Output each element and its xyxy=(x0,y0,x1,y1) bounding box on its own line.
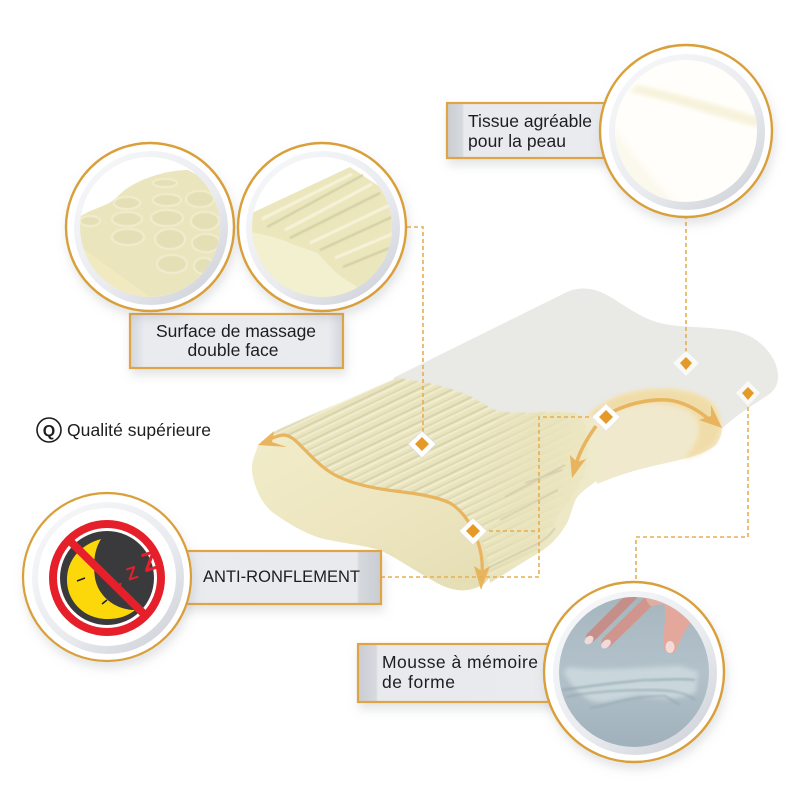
pillow: contour arrow bottom xyxy=(474,566,490,590)
marker: memory foam xyxy=(736,381,760,406)
icon: no snoring moon: z xyxy=(114,577,125,594)
pillow: top arc arrowhead xyxy=(699,405,722,428)
label: massage surface xyxy=(130,314,343,368)
label: memory foam xyxy=(358,644,558,702)
panel: massage surface xyxy=(66,143,406,368)
icon: no snoring moon: Z xyxy=(124,562,140,585)
label: massage surface: Surface de massage xyxy=(156,321,316,341)
icon: no snoring moon: Z xyxy=(138,545,163,578)
marker: ribbed surface xyxy=(408,431,436,458)
label: soft fabric: pour la peau xyxy=(468,131,566,151)
label: memory foam: de forme xyxy=(382,672,455,692)
label: massage surface: double face xyxy=(188,340,278,360)
circle: ridge texture xyxy=(238,143,406,311)
badge: superior quality: Qualité supérieure xyxy=(67,420,211,440)
pillow: ribbed surface xyxy=(258,378,587,578)
label: soft fabric xyxy=(447,103,617,158)
pillow: contour arrow left xyxy=(258,431,287,447)
pillow: side arc arrowhead xyxy=(570,455,586,478)
badge: superior quality: Q xyxy=(43,423,55,440)
label: anti-snoring xyxy=(180,551,381,604)
marker: contour xyxy=(459,518,487,545)
circle: fabric close-up xyxy=(600,45,772,217)
circle: anti-snoring icon xyxy=(23,493,191,661)
pillow xyxy=(252,288,778,590)
badge: superior quality xyxy=(37,418,211,442)
connector lines xyxy=(381,215,748,582)
label: memory foam: Mousse à mémoire xyxy=(382,652,538,672)
panel: anti-snoring xyxy=(23,493,381,661)
pillow: rib fade on right xyxy=(470,412,587,578)
label: soft fabric: Tissue agréable xyxy=(468,111,592,131)
pillow: memory foam opening xyxy=(585,388,722,484)
circle: memory foam close-up xyxy=(544,582,724,762)
label: anti-snoring: ANTI-RONFLEMENT xyxy=(203,568,360,586)
pillow: fabric top xyxy=(393,288,778,482)
circle: bubble texture xyxy=(66,143,234,311)
panel: memory foam xyxy=(358,582,724,762)
icon: hand xyxy=(584,597,691,654)
pillow: deep grooves xyxy=(488,465,565,568)
pillow: orange contour curve xyxy=(262,435,482,572)
panel: soft fabric xyxy=(447,45,772,217)
marker: side xyxy=(592,404,620,431)
pillow: top arc arrow xyxy=(612,400,712,422)
pillow: side arc arrow xyxy=(575,426,596,468)
pillow: side of foam xyxy=(482,412,600,583)
pillow: foam glow xyxy=(588,390,720,459)
marker: fabric xyxy=(673,351,699,376)
icon: no snoring moon xyxy=(53,524,163,632)
pillow: front face xyxy=(252,435,489,590)
